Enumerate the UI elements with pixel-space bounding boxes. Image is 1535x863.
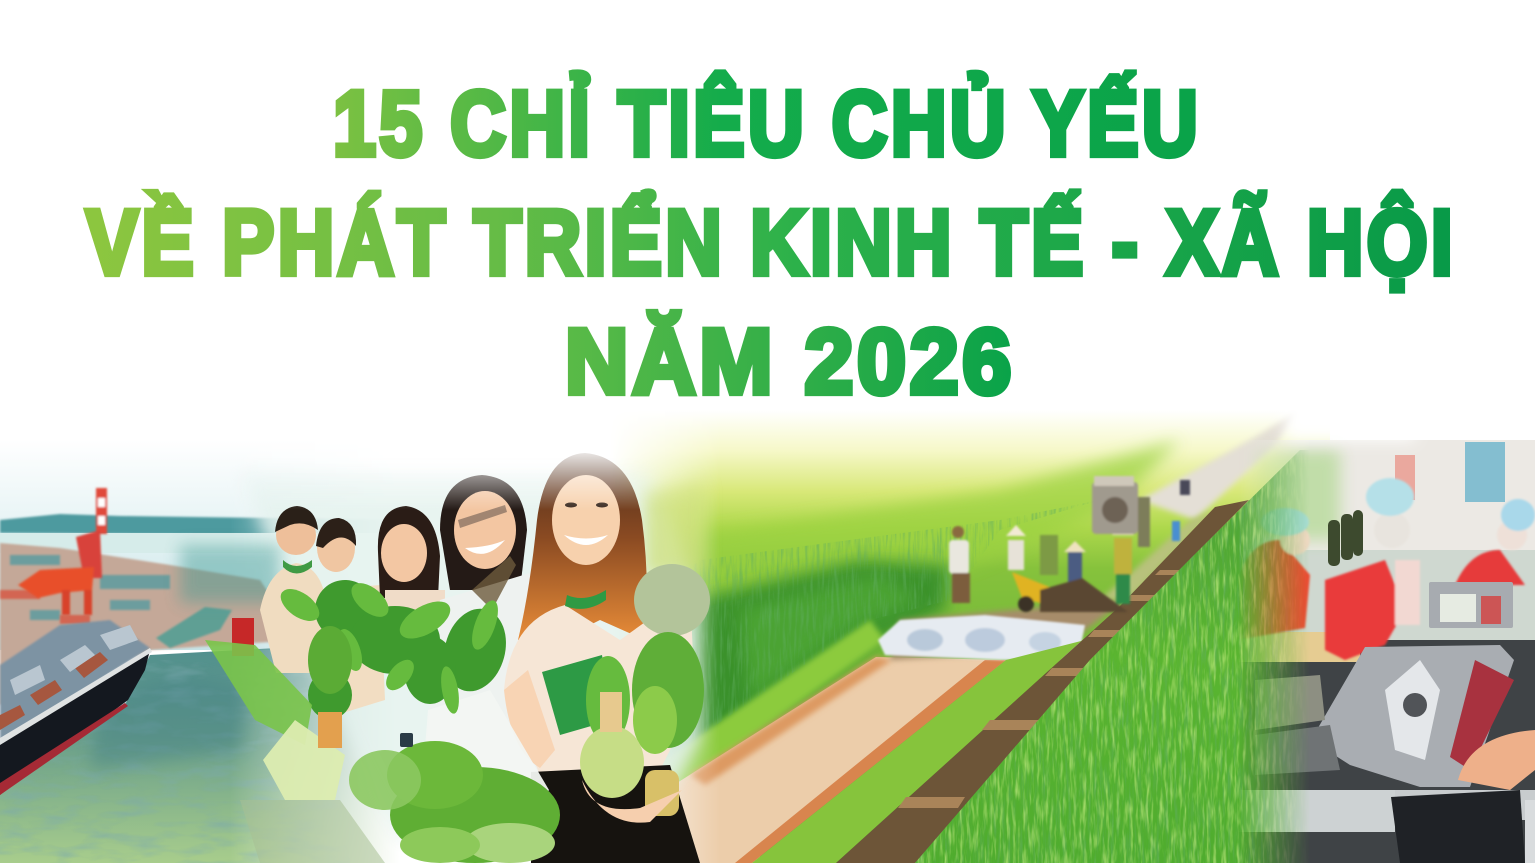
photo: rice field and road construction bbox=[600, 410, 1330, 863]
person 4 woman with glasses bbox=[438, 475, 527, 640]
seated hands bbox=[1458, 730, 1535, 790]
ship deck bbox=[0, 620, 150, 740]
water bbox=[0, 648, 388, 863]
title line 1: 15 CHỈ TIÊU CHỦ YẾU bbox=[333, 71, 1201, 175]
person 5 front woman bbox=[504, 453, 700, 863]
title bbox=[86, 71, 1456, 413]
black fabric bbox=[1391, 790, 1525, 863]
quay with containers bbox=[0, 543, 300, 705]
photo: garment factory bbox=[1230, 440, 1535, 863]
gravel pile bbox=[878, 615, 1085, 660]
crane bbox=[18, 488, 107, 615]
upper road bbox=[1141, 419, 1288, 521]
mixer truck bbox=[1092, 476, 1138, 534]
worker 3 bbox=[1455, 499, 1535, 585]
vegetables bbox=[205, 564, 710, 863]
canal bbox=[836, 500, 1249, 863]
person 2 woman bbox=[316, 518, 385, 720]
factory floor dark zone bbox=[1235, 640, 1535, 863]
bok choy stalks bbox=[263, 720, 345, 800]
field furrows bbox=[706, 434, 1182, 596]
photo: port with cargo ship bbox=[0, 469, 388, 863]
right grass bank bbox=[915, 450, 1330, 863]
white shopping bag bbox=[426, 710, 549, 791]
foreground leaves bbox=[390, 767, 560, 863]
ship hull bbox=[0, 650, 150, 795]
worker 1 bbox=[1237, 508, 1310, 640]
photo: five people with vegetables bbox=[180, 453, 710, 863]
grass strip beside canal bbox=[752, 640, 1083, 863]
workers bbox=[949, 476, 1190, 612]
worker 2 bbox=[1325, 478, 1420, 660]
wheelbarrow bbox=[1012, 572, 1052, 612]
person 1 man bbox=[260, 506, 326, 673]
person 3 woman bbox=[378, 506, 445, 610]
red sign bbox=[232, 618, 254, 656]
title line 3: NĂM 2026 bbox=[565, 311, 1015, 413]
thread spools bbox=[1328, 510, 1363, 566]
road bbox=[679, 657, 1004, 850]
control monitor bbox=[1429, 582, 1513, 628]
wristwatch and hand bbox=[400, 733, 413, 747]
second ship bbox=[156, 607, 232, 648]
sewing machine bbox=[1255, 645, 1514, 787]
